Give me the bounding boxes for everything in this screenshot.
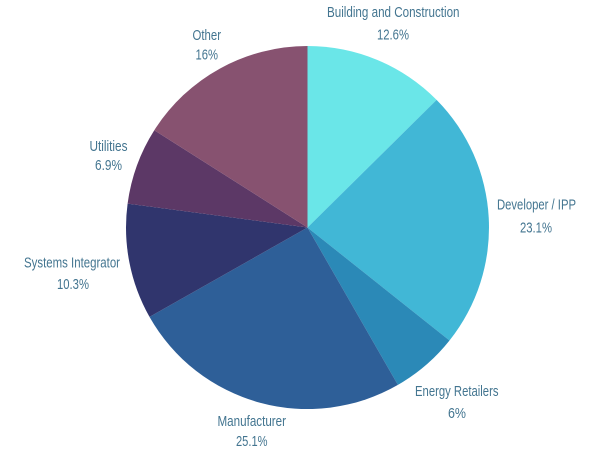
label: Utilities bbox=[90, 139, 128, 174]
label: Manufacturer: 25.1% bbox=[236, 434, 268, 450]
label: Utilities: 6.9% bbox=[95, 158, 122, 174]
slice: Systems Integrator 10.3% bbox=[126, 204, 308, 317]
label: Developer / IPP: Developer / IPP bbox=[497, 198, 576, 214]
slice: Manufacturer 25.1% bbox=[150, 228, 398, 409]
pie chart bbox=[126, 46, 489, 409]
slice: Building and Construction 12.6% bbox=[308, 46, 437, 227]
label: Building and Construction: Building and Construction bbox=[327, 5, 460, 21]
label: Building and Construction bbox=[327, 5, 460, 44]
slice: Energy Retailers 6% bbox=[308, 228, 450, 385]
label: Other bbox=[192, 28, 221, 64]
label: Systems Integrator bbox=[24, 256, 120, 293]
label: Developer / IPP bbox=[497, 198, 576, 237]
label: Other: 16% bbox=[196, 48, 218, 64]
slice: Utilities 6.9% bbox=[128, 130, 307, 228]
label: Manufacturer: Manufacturer bbox=[218, 414, 286, 430]
label: Energy Retailers: Energy Retailers bbox=[415, 384, 498, 400]
label: Other: Other bbox=[192, 28, 221, 44]
slice: Other 16% bbox=[154, 46, 308, 228]
label: Systems Integrator: Systems Integrator bbox=[24, 256, 120, 272]
label: Building and Construction: 12.6% bbox=[377, 28, 409, 44]
label: Systems Integrator: 10.3% bbox=[57, 277, 89, 293]
label: Manufacturer bbox=[218, 414, 286, 450]
label: Utilities: Utilities bbox=[90, 139, 128, 155]
label: Developer / IPP: 23.1% bbox=[520, 221, 552, 237]
label: Energy Retailers: 6% bbox=[448, 406, 466, 422]
slice: Developer / IPP 23.1% bbox=[308, 100, 489, 341]
label: Energy Retailers bbox=[415, 384, 498, 422]
